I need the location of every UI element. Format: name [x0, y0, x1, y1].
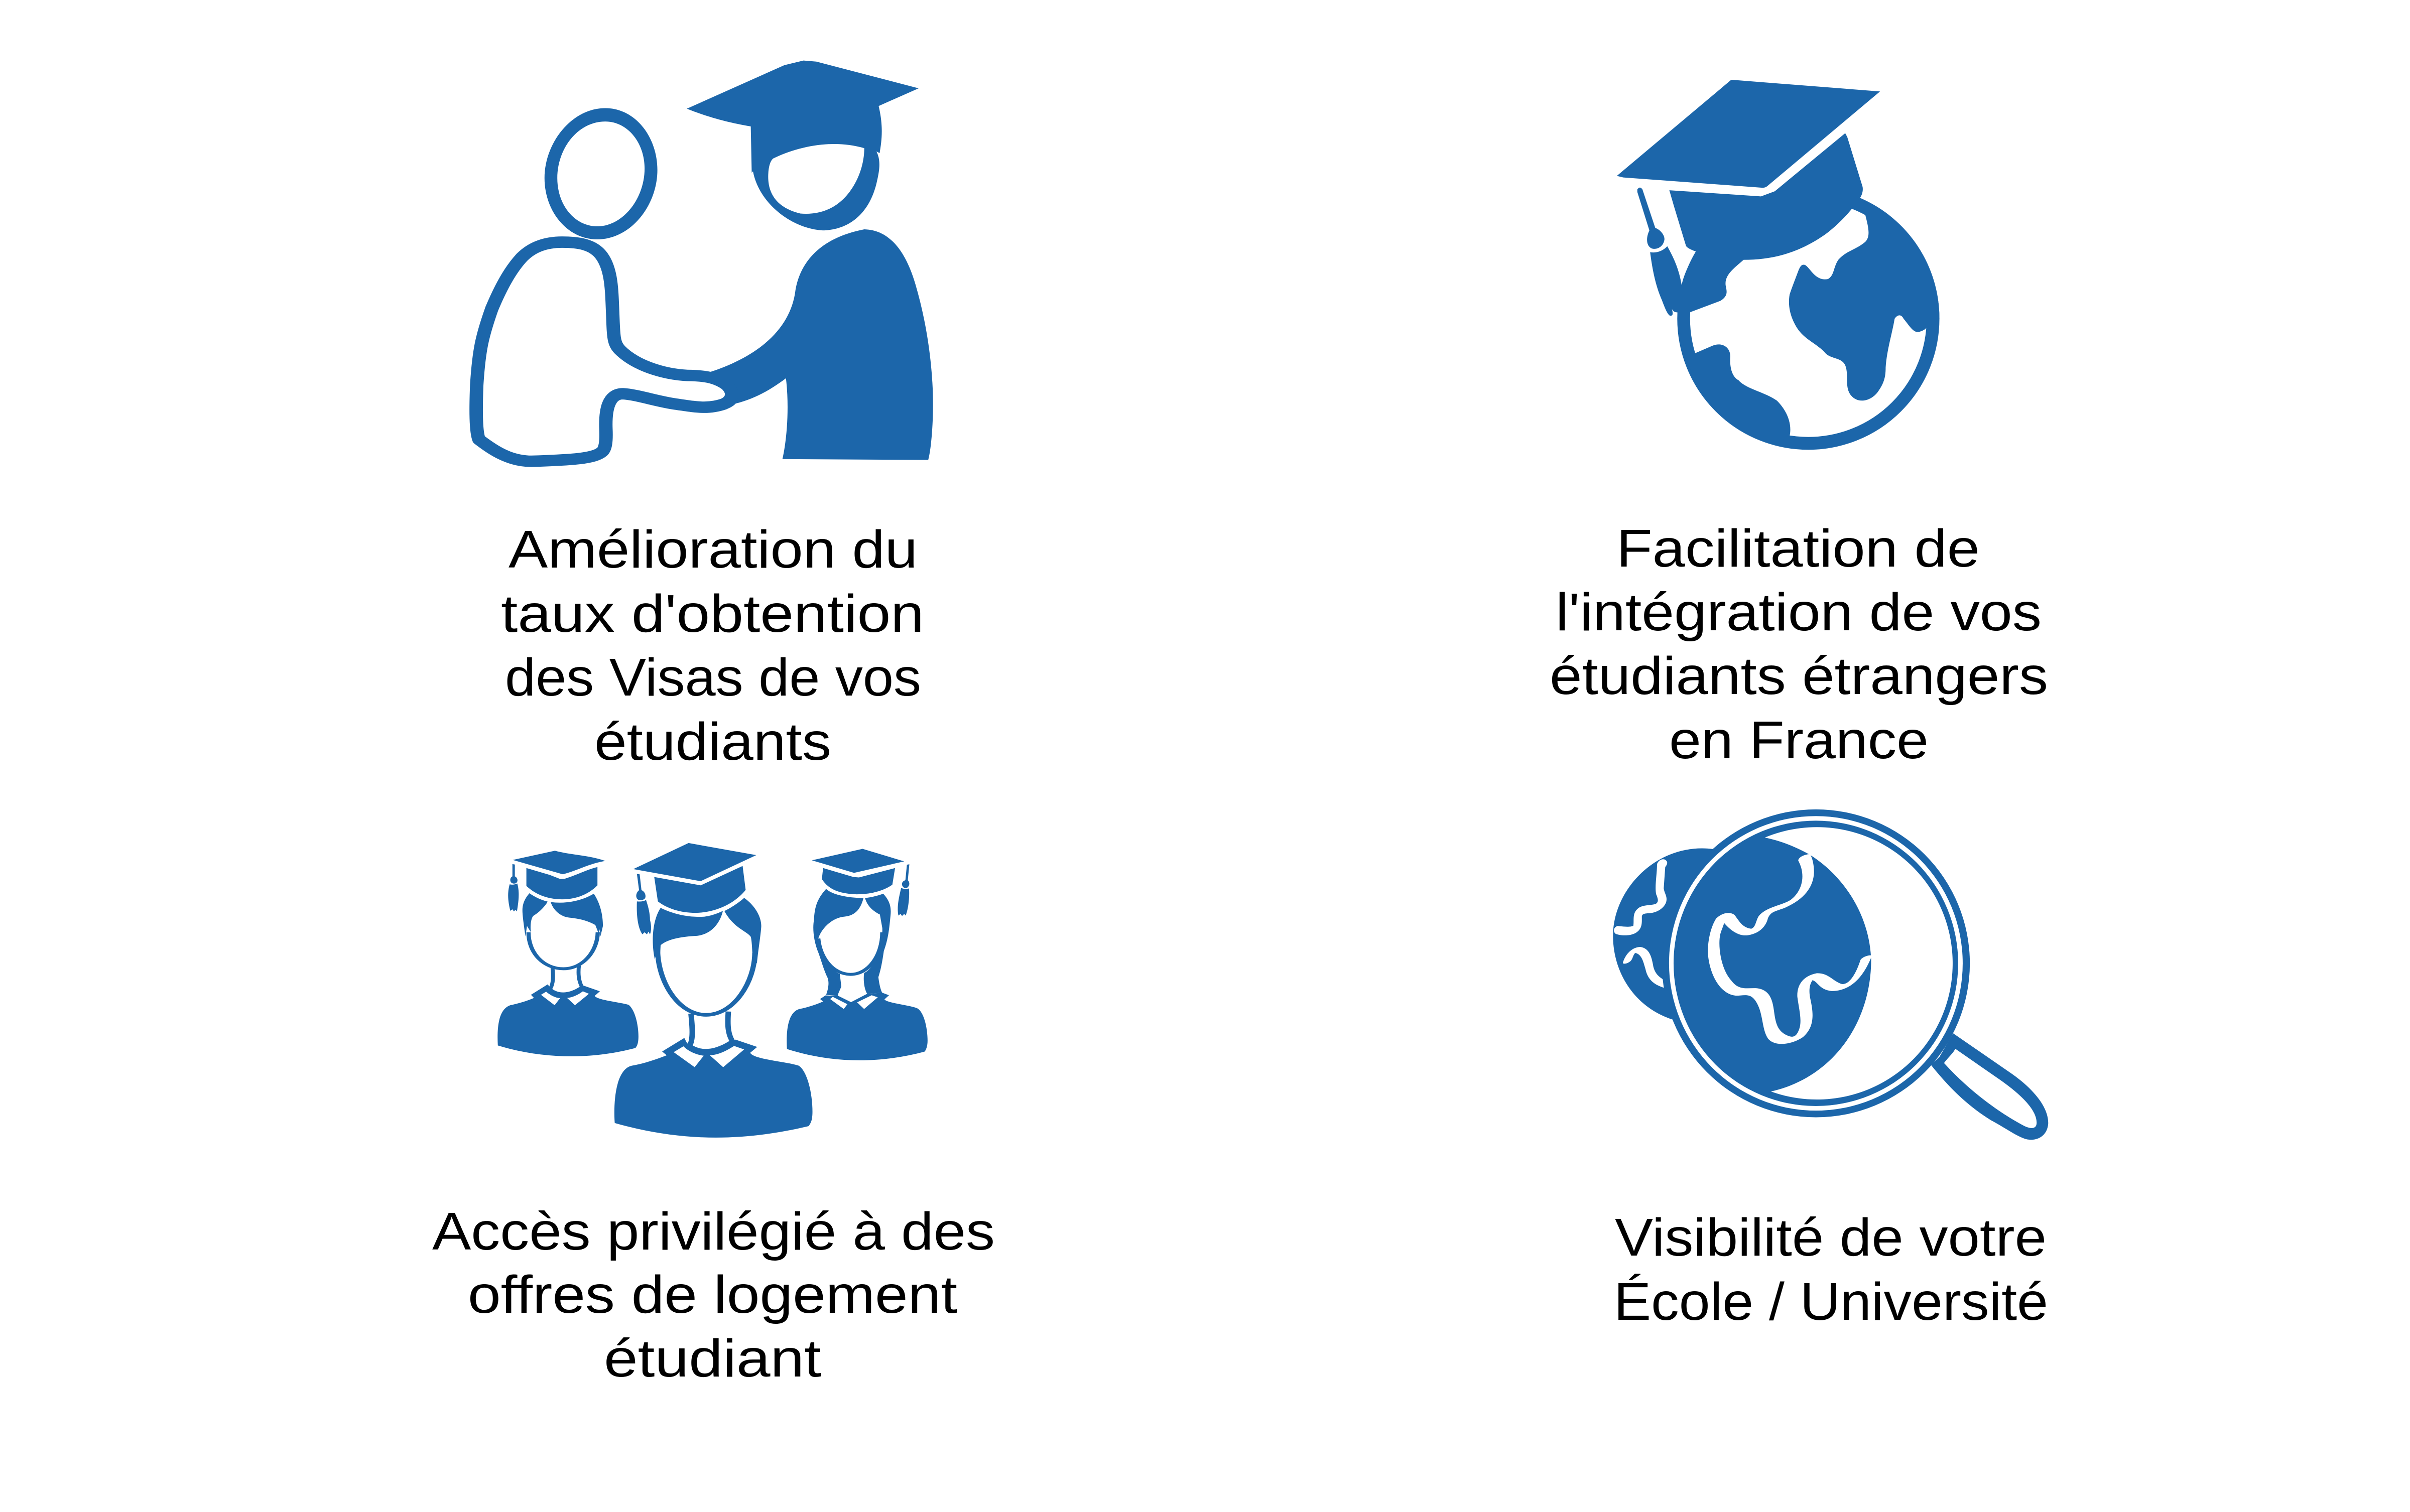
- text: housing caption: offres de logement: [468, 1265, 957, 1324]
- text: visa success caption: taux d'obtention: [501, 584, 924, 643]
- text: integration caption: Facilitation de: [1616, 519, 1980, 578]
- text: visa success caption: étudiants: [594, 712, 831, 771]
- icon: handshake with graduate: [476, 61, 933, 461]
- text: housing caption: Accès privilégié à des: [432, 1202, 995, 1261]
- text: integration caption: étudiants étrangers: [1550, 646, 2048, 706]
- icon: three graduates: [497, 843, 928, 1138]
- left graduate: [497, 851, 639, 1056]
- text: visibility caption: Visibilité de votre: [1615, 1208, 2047, 1267]
- panel: integration in France: [1550, 80, 2048, 770]
- text: integration caption: l'intégration de vos: [1556, 583, 2042, 642]
- lens: [1662, 809, 1970, 1118]
- text: housing caption: [432, 1202, 995, 1388]
- text: integration caption: [1550, 519, 2048, 770]
- center graduate: [614, 843, 813, 1138]
- back globe: [1613, 848, 1718, 1020]
- right graduate: [787, 849, 928, 1060]
- text: visa success caption: des Visas de vos: [505, 648, 921, 707]
- text: integration caption: en France: [1669, 711, 1929, 770]
- text: visa success caption: [501, 520, 924, 771]
- text: visa success caption: Amélioration du: [509, 520, 918, 579]
- icon: globe with graduation cap: [1617, 80, 1940, 444]
- panel: visa success: [476, 61, 933, 771]
- panel: school visibility: [1613, 809, 2048, 1331]
- handle: [1931, 1033, 2048, 1140]
- text: housing caption: étudiant: [604, 1329, 821, 1388]
- text: visibility caption: École / Université: [1614, 1272, 2048, 1331]
- text: visibility caption: [1614, 1208, 2048, 1331]
- icon: magnifying glass over globe: [1613, 809, 2048, 1140]
- panel: student housing: [432, 843, 995, 1388]
